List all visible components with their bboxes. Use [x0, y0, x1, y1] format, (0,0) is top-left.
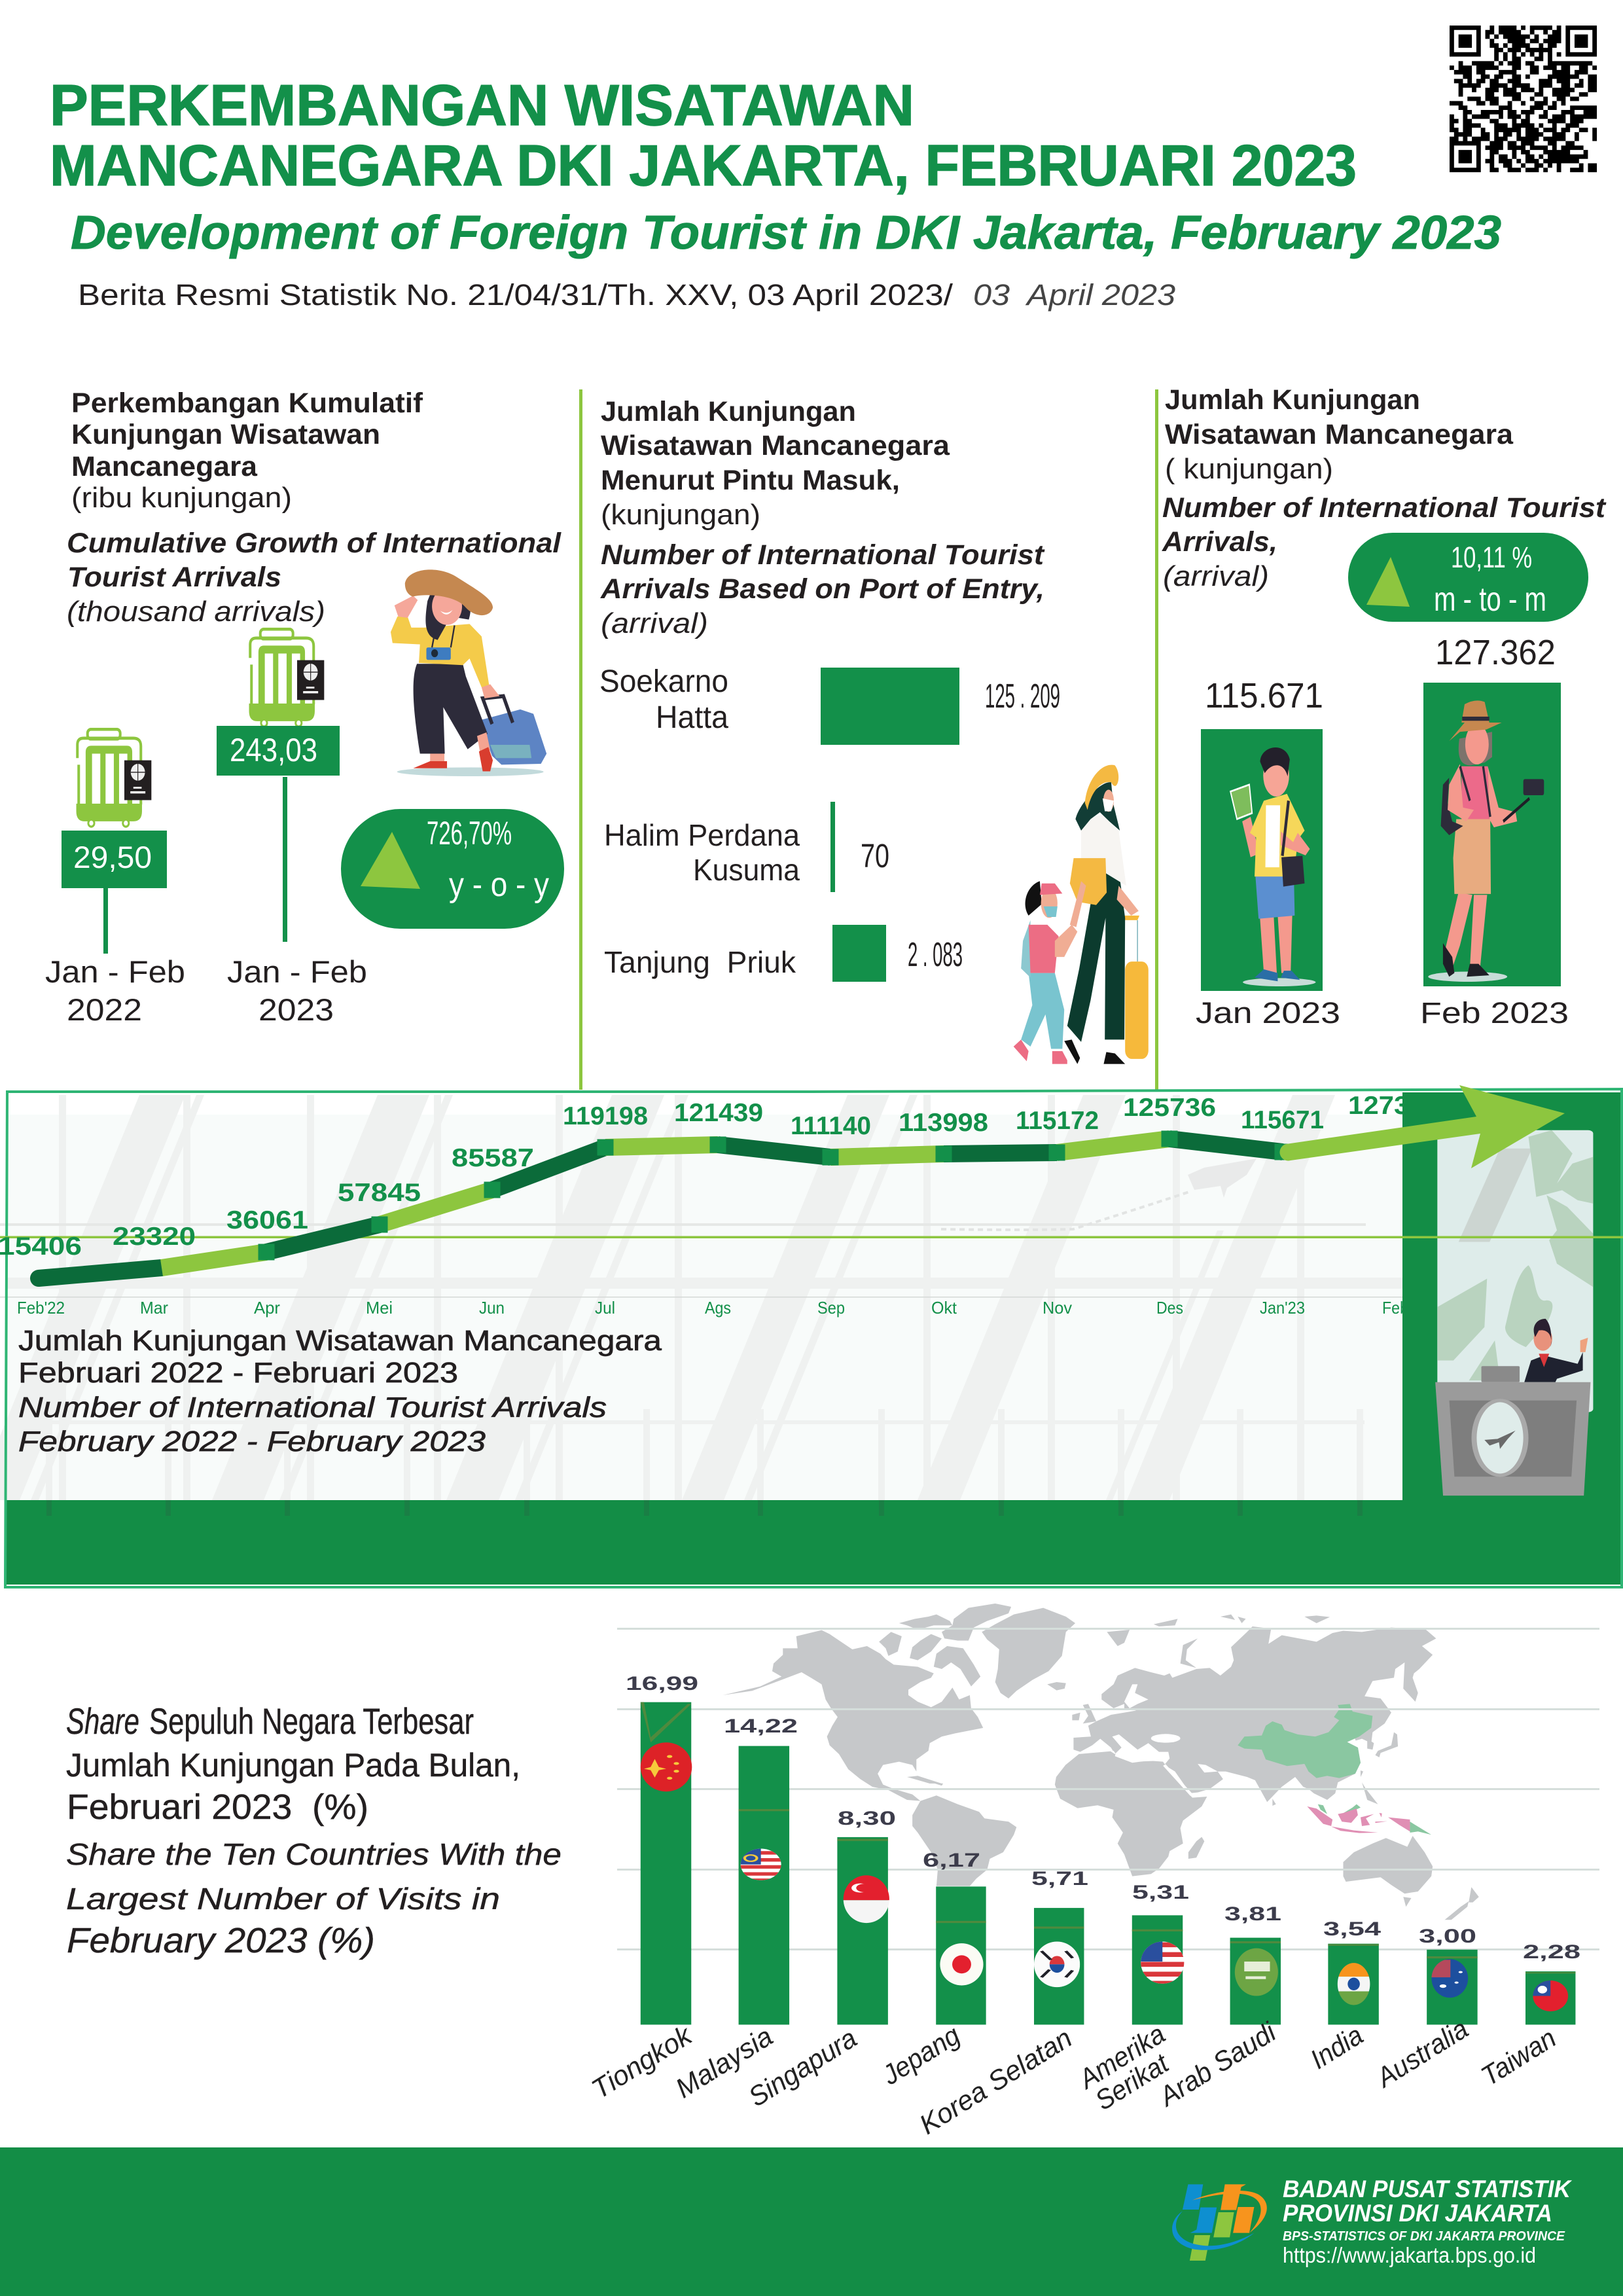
row: Halim Perdana Kusuma: Halim Perdana	[604, 818, 800, 852]
row: Halim Perdana Kusuma	[604, 802, 889, 892]
stem 2022	[103, 888, 108, 954]
chart value labels: 23320	[113, 1223, 196, 1251]
section heading: Jumlah Kunjungan Pada Bulan,	[66, 1747, 520, 1784]
chart value labels: 113998	[899, 1109, 988, 1137]
chart markers	[258, 1131, 1291, 1261]
panel heading: Wisatawan Mancanegara	[1165, 419, 1514, 450]
panel heading: (arrival)	[1163, 560, 1269, 592]
chart grid lines	[617, 1628, 1599, 1950]
chart month labels: Okt	[931, 1298, 957, 1318]
chart month labels: Feb'22	[17, 1298, 65, 1318]
agency name: BPS-STATISTICS OF DKI JAKARTA PROVINCE	[1283, 2229, 1565, 2244]
main title Indonesian	[50, 73, 1357, 198]
bar value labels	[626, 1673, 1580, 1963]
country labels: Tiongkok	[586, 2019, 698, 2105]
flag: Malaysia	[741, 1848, 781, 1880]
chart month labels: Sep	[817, 1298, 845, 1318]
country labels: Taiwan	[1476, 2022, 1561, 2092]
column Jan 2023	[1196, 676, 1340, 1030]
chart caption	[18, 1325, 662, 1458]
panel heading: Jumlah Kunjungan	[1165, 384, 1420, 416]
illustration: airport window panel	[1437, 1130, 1593, 1412]
icon: suitcase 2023	[249, 629, 324, 726]
panel heading: (kunjungan)	[601, 499, 760, 531]
footer	[0, 2147, 1623, 2296]
flag: Japan	[940, 1943, 984, 1985]
chart month labels: Jul	[595, 1298, 615, 1318]
badge: y-o-y growth	[341, 809, 564, 929]
illustration: female tourist with selfie stick	[1428, 700, 1544, 982]
panel: port of entry	[599, 396, 1149, 1064]
country labels: India	[1305, 2019, 1368, 2075]
panel heading: Cumulative Growth of International	[67, 528, 562, 559]
chart value labels: 121439	[674, 1099, 763, 1127]
country labels: Jepang	[876, 2019, 965, 2091]
panel heading	[1162, 384, 1607, 592]
main title Indonesian: MANCANEGARA DKI JAKARTA, FEBRUARI 2023	[50, 133, 1357, 198]
chart value labels: 115671	[1241, 1106, 1324, 1134]
label Jan-Feb 2022	[45, 954, 185, 1027]
post silhouettes on base	[46, 1500, 1363, 1516]
value box 29,50	[62, 831, 167, 888]
publication reference: 03 April 2023	[973, 278, 1175, 312]
flag: Australia	[1431, 1959, 1469, 1998]
badge: m-to-m growth: 10,11 %	[1451, 541, 1532, 574]
panel heading: ( kunjungan)	[1165, 453, 1333, 485]
green frame base	[6, 1092, 1622, 1585]
column Jan 2023: 115.671	[1205, 676, 1323, 715]
main title Indonesian: PERKEMBANGAN WISATAWAN	[50, 73, 914, 137]
panel heading: (ribu kunjungan)	[71, 482, 292, 514]
bar value labels: 5,71	[1031, 1868, 1088, 1890]
value box 243,03	[217, 726, 340, 776]
bar value labels: 6,17	[923, 1850, 980, 1871]
panel heading: Arrivals Based on Port of Entry,	[600, 573, 1044, 605]
panel: cumulative growth	[45, 387, 564, 1027]
value box 243,03: 243,03	[230, 732, 317, 768]
section heading: Largest Number of Visits in	[66, 1882, 500, 1916]
country labels: Australia	[1370, 2013, 1473, 2094]
chart month labels: Mar	[140, 1298, 168, 1318]
chart month labels: Jan'23	[1260, 1298, 1305, 1318]
bar value labels: 8,30	[838, 1808, 896, 1829]
map: Europe, Africa, Asia, Oceania	[1055, 1615, 1479, 1920]
chart month labels: Ags	[705, 1298, 731, 1318]
label Jan-Feb 2023	[227, 954, 367, 1027]
chart value labels: 85587	[452, 1144, 534, 1172]
row: Halim Perdana Kusuma: Kusuma	[693, 853, 800, 887]
country labels: Arab Saudi	[1152, 2016, 1282, 2113]
icon: BPS logo	[1172, 2184, 1267, 2261]
chart month labels: Apr	[254, 1298, 280, 1318]
chart month labels: Nov	[1043, 1298, 1072, 1318]
panel: monthly comparison	[1162, 384, 1607, 1030]
map: Americas and Greenland	[722, 1604, 1075, 1886]
panel heading: (thousand arrivals)	[67, 596, 325, 628]
bar value labels: 3,54	[1323, 1918, 1381, 1940]
agency name: PROVINSI DKI JAKARTA	[1283, 2200, 1552, 2227]
chart month labels: Jun	[479, 1298, 505, 1318]
footer band	[0, 2147, 1623, 2296]
agency name	[1283, 2176, 1572, 2267]
section heading: Sepuluh Negara Terbesar	[149, 1700, 474, 1742]
chart month labels	[18, 1301, 1402, 1317]
chart value labels: 119198	[563, 1102, 648, 1130]
chart value labels: 36061	[226, 1206, 308, 1234]
divider right	[1155, 389, 1158, 1090]
chart month labels: Feb	[1382, 1298, 1408, 1318]
column Feb 2023	[1420, 633, 1569, 1030]
country labels: Serikat	[1090, 2047, 1175, 2116]
row: Soekarno Hatta	[599, 664, 1060, 745]
illustration: male tourist with map	[1230, 747, 1315, 986]
divider left	[579, 389, 582, 1090]
chart value labels: 125736	[1123, 1094, 1216, 1122]
section heading: Februari 2023 (%)	[67, 1787, 368, 1827]
chart value labels	[0, 1092, 1440, 1261]
row: Soekarno Hatta: 125 . 209	[985, 677, 1060, 715]
panel heading: Jumlah Kunjungan	[601, 396, 856, 427]
panel heading: Mancanegara	[71, 451, 258, 482]
label Jan-Feb 2023: 2023	[259, 992, 334, 1027]
value box 29,50: 29,50	[73, 840, 152, 874]
country labels: Singapura	[743, 2022, 862, 2113]
panel heading: Tourist Arrivals	[67, 562, 281, 593]
bar value labels: 14,22	[724, 1715, 798, 1737]
section heading: Share	[66, 1700, 139, 1742]
flag: India	[1338, 1963, 1370, 2005]
panel heading: Kunjungan Wisatawan	[71, 419, 380, 450]
chart value labels: 57845	[338, 1179, 421, 1207]
chart value labels: 115172	[1016, 1107, 1099, 1135]
column Feb 2023: Feb 2023	[1420, 996, 1569, 1030]
row: Soekarno Hatta: Soekarno	[599, 664, 728, 699]
badge: y-o-y growth: 726,70%	[427, 815, 512, 852]
flag: China	[640, 1742, 692, 1792]
chart caption: Number of International Tourist Arrivals	[18, 1391, 607, 1424]
agency name: https://www.jakarta.bps.go.id	[1283, 2243, 1536, 2267]
stem 2023	[283, 777, 287, 942]
line chart with markers	[39, 1139, 1283, 1278]
section heading	[66, 1700, 562, 1960]
badge: m-to-m growth	[1348, 533, 1588, 622]
agency name: BADAN PUSAT STATISTIK	[1283, 2176, 1572, 2202]
country labels	[586, 2013, 1561, 2140]
bar value labels: 5,31	[1132, 1882, 1189, 1903]
panel: top ten countries share	[66, 1604, 1599, 2140]
icon: check-in desk	[1435, 1382, 1590, 1496]
row: Halim Perdana Kusuma: 70	[861, 837, 889, 874]
illustration: woman with hat and suitcase	[391, 569, 546, 776]
flag: Saudi Arabia	[1235, 1948, 1278, 1996]
badge: m-to-m growth: m - to - m	[1434, 581, 1546, 619]
chart month labels: Des	[1156, 1298, 1183, 1318]
panel heading	[67, 387, 562, 628]
world map background	[722, 1604, 1479, 1920]
country labels: Amerika	[1072, 2018, 1170, 2096]
chart value labels: 111140	[791, 1112, 871, 1140]
bar value labels: 2,28	[1523, 1941, 1580, 1963]
bar chart	[637, 1702, 1575, 2024]
chart value labels: 127362	[1348, 1092, 1440, 1120]
bar value labels: 3,00	[1419, 1926, 1476, 1947]
panel heading: Menurut Pintu Masuk,	[601, 465, 900, 496]
flag: Taiwan	[1533, 1981, 1568, 2012]
arrow: growth to February 2023	[1280, 1085, 1565, 1168]
lime baseline	[0, 1236, 1623, 1238]
badge: y-o-y growth: y - o - y	[449, 866, 549, 904]
label Jan-Feb 2023: Jan - Feb	[227, 954, 367, 989]
chart caption: Jumlah Kunjungan Wisatawan Mancanegara	[18, 1325, 662, 1357]
chart caption: Februari 2022 - Februari 2023	[18, 1357, 458, 1389]
row: Soekarno Hatta: Hatta	[656, 700, 728, 735]
icon: suitcase 2022	[77, 729, 151, 827]
panel: monthly arrivals trend	[0, 1085, 1623, 1587]
row: Tanjung Priuk: 2 . 083	[908, 936, 963, 974]
label Jan-Feb 2022: 2022	[67, 992, 142, 1027]
frame border	[5, 1089, 1622, 1587]
row: Tanjung Priuk	[604, 925, 963, 982]
flag: United States	[1141, 1941, 1185, 1984]
country labels: Korea Selatan	[914, 2022, 1077, 2140]
chart month labels: Mei	[366, 1298, 393, 1318]
panel heading: Number of International Tourist	[601, 539, 1045, 571]
column Jan 2023: Jan 2023	[1196, 996, 1340, 1030]
publication reference: Berita Resmi Statistik No. 21/04/31/Th. XXV, 03 April 2023/	[78, 278, 954, 312]
chart value labels: 15406	[0, 1232, 82, 1261]
title block	[50, 73, 1501, 312]
chart caption: February 2022 - February 2023	[18, 1426, 486, 1458]
column Feb 2023: 127.362	[1435, 633, 1556, 672]
panel heading	[600, 396, 1045, 639]
illustration: mother and child with suitcase	[1014, 765, 1149, 1064]
QR code	[1450, 26, 1597, 172]
row: Tanjung Priuk: Tanjung Priuk	[604, 945, 796, 979]
flag: South Korea	[1033, 1941, 1080, 1988]
panel heading: Wisatawan Mancanegara	[601, 430, 950, 461]
panel heading: Perkembangan Kumulatif	[71, 387, 423, 419]
chart background	[0, 1092, 1402, 1500]
subtitle English: Development of Foreign Tourist in DKI Jakarta, February 2023	[71, 207, 1501, 259]
panel heading: Arrivals,	[1162, 526, 1277, 558]
flag: Singapore	[843, 1875, 889, 1923]
panel heading: (arrival)	[601, 607, 708, 639]
section heading: February 2023 (%)	[67, 1921, 375, 1960]
section heading: Share the Ten Countries With the	[66, 1837, 562, 1871]
label Jan-Feb 2022: Jan - Feb	[45, 954, 185, 989]
bar value labels: 16,99	[626, 1673, 698, 1695]
bar value labels: 3,81	[1224, 1903, 1281, 1925]
panel heading: Number of International Tourist	[1162, 492, 1607, 524]
country labels: Malaysia	[670, 2020, 778, 2104]
